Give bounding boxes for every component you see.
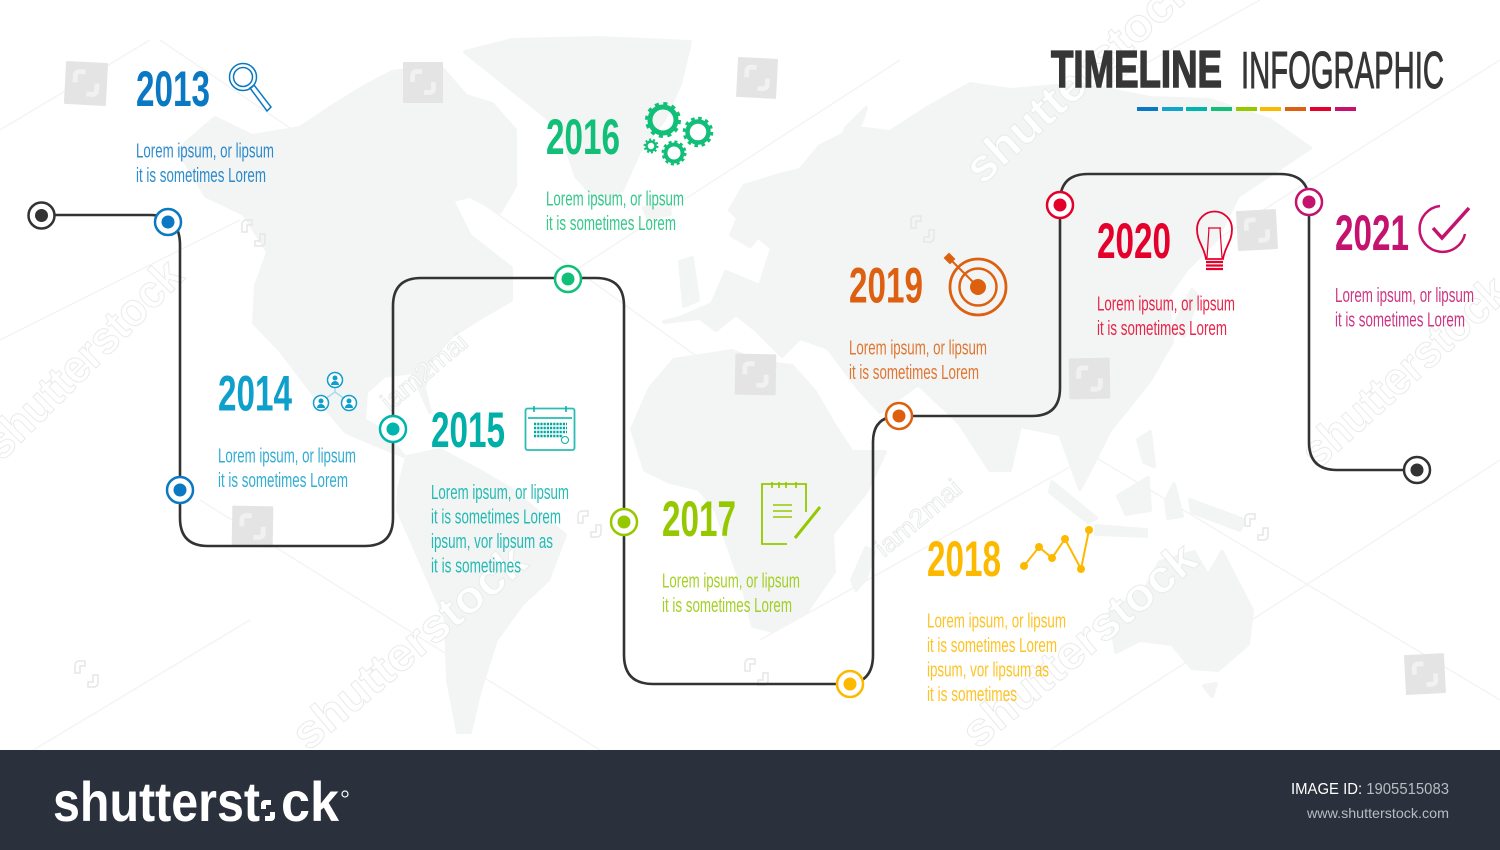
entry 2014: 2014 (218, 366, 292, 422)
watermark tiles (64, 57, 1446, 695)
entry 2018: 2018 (927, 531, 1001, 587)
entry 2017: it is sometimes Lorem (662, 595, 792, 617)
entry 2018: ipsum, vor lipsum as (927, 660, 1049, 682)
entry 2013 (136, 61, 274, 187)
entry 2019: 2019 (849, 258, 923, 314)
diagonal watermark text: iam2mai (869, 473, 968, 563)
node 2021 (1296, 189, 1322, 215)
entry 2021: 2021 (1335, 205, 1409, 261)
entry 2020 (1097, 212, 1235, 340)
entry 2018: it is sometimes Lorem (927, 635, 1057, 657)
entry 2015: ipsum, vor lipsum as (431, 531, 553, 553)
entry 2018 (927, 526, 1093, 706)
entry 2020: 2020 (1097, 213, 1171, 269)
entry 2019: Lorem ipsum, or lipsum (849, 338, 987, 360)
title colour bars (1137, 107, 1356, 111)
icon: line chart (1020, 526, 1093, 573)
timeline path (41, 174, 1417, 684)
diagonal watermark text: shutterstock (951, 531, 1207, 758)
icon: magnifier (230, 64, 271, 111)
entry 2015: it is sometimes (431, 556, 521, 578)
node 2013 (155, 209, 181, 235)
entry 2021 (1335, 205, 1474, 332)
entry 2019: it is sometimes Lorem (849, 362, 979, 384)
title (1051, 41, 1444, 100)
entry 2019 (849, 254, 1006, 384)
entry 2015: Lorem ipsum, or lipsum (431, 482, 569, 504)
entry 2014: it is sometimes Lorem (218, 470, 348, 492)
node 2014 (167, 477, 193, 503)
entry 2013: Lorem ipsum, or lipsum (136, 140, 274, 162)
entry 2016: 2016 (546, 109, 620, 165)
footer bar (0, 750, 1500, 850)
entry 2016: Lorem ipsum, or lipsum (546, 188, 684, 210)
diagonal watermark text: shutterstock (281, 533, 537, 760)
icon: target and arrow (945, 254, 1006, 315)
entry 2017: 2017 (662, 491, 736, 547)
entry 2015 (431, 402, 574, 578)
timeline end node (1404, 457, 1430, 483)
icon: gears (644, 104, 712, 164)
footer logo: ck (281, 770, 340, 833)
icon: calendar (526, 406, 574, 450)
entry 2020: it is sometimes Lorem (1097, 318, 1227, 340)
node 2019 (886, 403, 912, 429)
entry 2017: Lorem ipsum, or lipsum (662, 570, 800, 592)
image id: IMAGE ID: 1905515083 (1291, 781, 1449, 798)
entry 2015: 2015 (431, 402, 505, 458)
diagonal watermark text: iam2mai (375, 327, 474, 417)
entry 2020: Lorem ipsum, or lipsum (1097, 294, 1235, 316)
entry 2018: Lorem ipsum, or lipsum (927, 610, 1066, 632)
entry 2013: 2013 (136, 61, 210, 117)
footer logo: shutterst (53, 770, 260, 833)
icon: light bulb (1197, 212, 1232, 269)
entry 2014: Lorem ipsum, or lipsum (218, 446, 356, 468)
world map background (178, 38, 1310, 732)
entry 2013: it is sometimes Lorem (136, 165, 266, 187)
icon: people network (314, 372, 356, 410)
title: TIMELINE (1051, 41, 1222, 99)
icon: notepad and pencil (762, 482, 820, 544)
small outlined watermark marks (75, 216, 1268, 687)
entry 2014 (218, 366, 356, 492)
entry 2016: it is sometimes Lorem (546, 213, 676, 235)
entry 2015: it is sometimes Lorem (431, 506, 561, 528)
website: www.shutterstock.com (1306, 805, 1449, 821)
node 2020 (1047, 192, 1073, 218)
node 2018 (837, 671, 863, 697)
node 2016 (555, 266, 581, 292)
timeline start node (28, 202, 54, 228)
entry 2017 (662, 482, 820, 617)
entry 2018: it is sometimes (927, 684, 1017, 706)
entry 2016 (546, 104, 712, 235)
node 2015 (380, 416, 406, 442)
node 2017 (611, 509, 637, 535)
icon: check circle (1420, 206, 1469, 252)
